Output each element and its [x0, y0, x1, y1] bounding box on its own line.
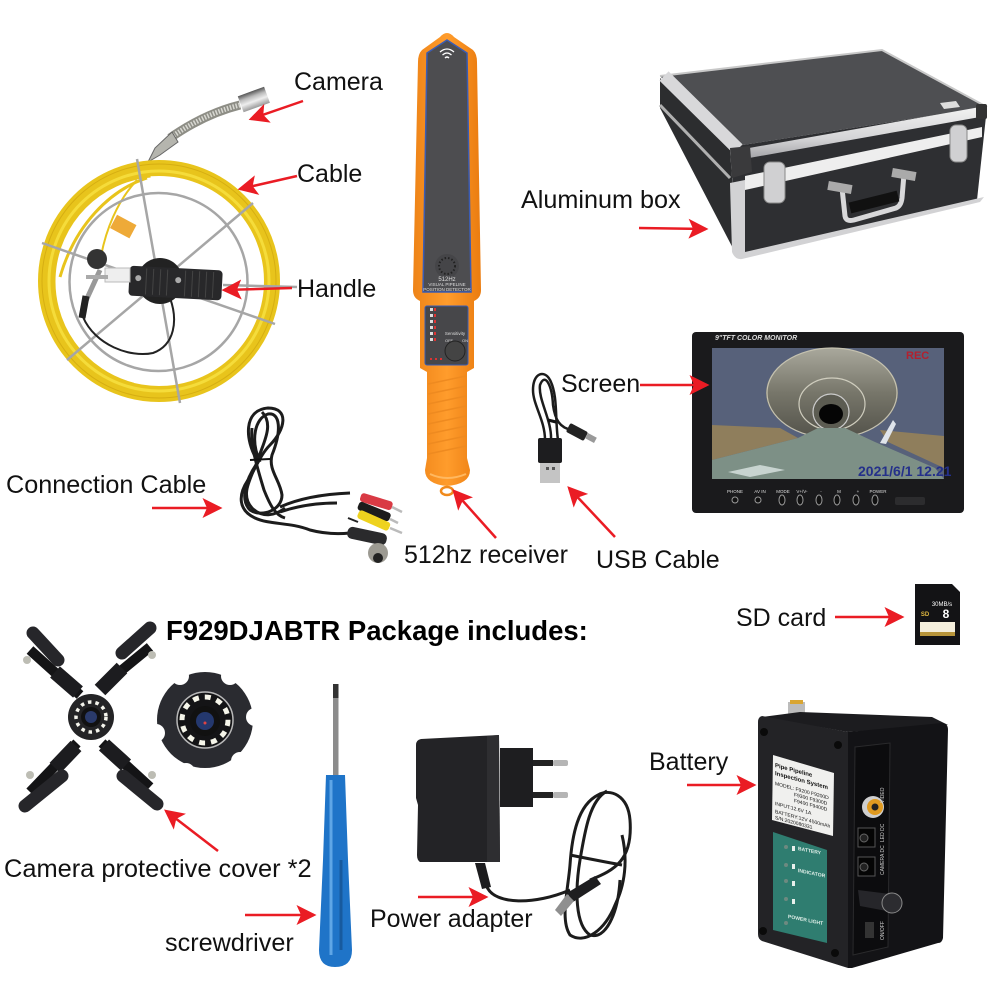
button labels: M — [837, 489, 841, 494]
label: Aluminum box: Aluminum box — [521, 186, 681, 214]
buttons — [732, 495, 878, 505]
button labels: MODE — [776, 489, 790, 494]
label: screwdriver: screwdriver — [165, 929, 294, 957]
panel text — [788, 844, 826, 927]
dark panel — [423, 40, 471, 292]
cable — [487, 791, 630, 938]
handle — [128, 266, 223, 300]
panel indicators — [784, 845, 788, 925]
button labels: + — [857, 489, 860, 494]
control panel — [425, 306, 468, 365]
panel text: POWER LIGHT — [788, 914, 824, 927]
handle — [842, 174, 904, 220]
icon: 512hz receiver: Sensitivity — [445, 331, 466, 336]
switch — [865, 922, 874, 938]
side labels: LED DC — [880, 823, 886, 842]
icon: aluminum box — [660, 50, 987, 259]
tunnel — [766, 348, 898, 438]
arrow: Aluminum box — [639, 228, 706, 229]
orange body — [413, 33, 481, 486]
label text: F9400 F9400D — [794, 798, 828, 813]
charger body — [416, 735, 500, 862]
icon: 512hz receiver: POSITION DETECTOR — [423, 287, 471, 292]
heading: package includes: F929DJABTR Package includes: — [166, 615, 588, 646]
arrow: protective cover — [166, 811, 218, 851]
DC plug — [567, 876, 601, 902]
BNC stem — [788, 702, 805, 722]
icon: SD card — [915, 584, 960, 645]
icon: connection cable — [241, 408, 402, 563]
label: Camera: Camera — [294, 68, 383, 96]
lid edges — [660, 50, 987, 107]
panel text: BATTERY — [798, 846, 822, 857]
knob — [858, 890, 892, 912]
orange label — [110, 215, 136, 238]
gooseneck tip — [148, 132, 178, 162]
label: Camera protective cover *2: Camera protective cover *2 — [4, 855, 312, 883]
label: Connection Cable: Connection Cable — [6, 471, 206, 499]
corners — [730, 146, 752, 178]
icon: battery box — [758, 700, 948, 968]
icon: SD card: 30MB/s — [932, 602, 952, 608]
arrow: Connection Cable — [152, 507, 220, 509]
arrow: Camera — [251, 101, 303, 119]
label text — [775, 762, 830, 836]
label text: S/N:2020080331 — [775, 815, 813, 831]
label: 512hz receiver: 512hz receiver — [404, 541, 568, 569]
bolts — [23, 651, 156, 779]
arrow: SD card — [835, 616, 902, 618]
plug pins — [533, 760, 553, 766]
label text: MODEL: F9200 F9200D — [775, 781, 829, 802]
side face — [848, 723, 948, 968]
side — [660, 78, 738, 258]
yellow cable coil — [42, 164, 276, 398]
front — [730, 107, 987, 258]
side labels: VIDEO — [880, 787, 886, 803]
hanging ring — [441, 487, 453, 495]
icon: screen monitor: REC — [906, 350, 929, 362]
button labels: PHONE — [727, 489, 743, 494]
LEDs — [430, 308, 442, 360]
label: SD card: SD card — [736, 604, 826, 632]
middle rail — [745, 127, 982, 190]
icon: camera protective cover, X shape — [23, 628, 157, 806]
panel text: INDICATOR — [798, 868, 826, 879]
icon: 512hz receiver — [413, 33, 481, 495]
aviation connector — [346, 526, 388, 546]
screw holes — [759, 728, 842, 957]
speaker — [435, 254, 459, 278]
label: Cable: Cable — [297, 160, 362, 188]
icon: cable reel with camera — [42, 87, 297, 403]
icon: 512hz receiver: ON — [462, 338, 468, 343]
icon: screen monitor — [692, 332, 964, 513]
label text: F9300 F9300D — [794, 792, 828, 807]
label text: Inspection System — [775, 770, 828, 791]
connector — [84, 270, 100, 305]
green panel — [773, 832, 827, 943]
arrow: Screen — [640, 384, 707, 386]
icon: screwdriver — [319, 684, 352, 967]
icon: screen monitor: 9"TFT COLOR MONITOR — [715, 335, 797, 342]
reel hub — [137, 258, 183, 304]
side recess — [853, 743, 890, 955]
notches — [147, 667, 264, 781]
gooseneck spring — [170, 105, 240, 138]
lower trim — [730, 180, 984, 259]
label: Battery: Battery — [649, 748, 729, 776]
arrow: Battery — [687, 784, 754, 786]
label: Handle: Handle — [297, 275, 376, 303]
strain relief — [475, 863, 491, 889]
label: Power adapter: Power adapter — [370, 905, 533, 933]
icon: SD card: SD — [921, 612, 930, 618]
arrow: Cable — [240, 176, 297, 189]
icon: 512hz receiver: VISUAL PIPELINE — [428, 282, 466, 287]
arrow: Handle — [224, 288, 292, 290]
label text: INPUT:12.6V 1A — [775, 801, 812, 817]
button labels: V+/V- — [796, 489, 808, 494]
side labels — [880, 787, 886, 940]
label text: Pipe Pipeline — [775, 762, 813, 779]
camera head — [238, 87, 270, 112]
white sticker — [940, 101, 960, 109]
end wheels — [25, 628, 157, 806]
top face — [762, 712, 948, 732]
icon: USB cable — [533, 374, 597, 483]
icon: SD card: 8 — [943, 607, 950, 621]
side labels: CAMERA DC — [880, 845, 886, 875]
button labels: AV IN — [754, 489, 766, 494]
panel text: 512Hz — [438, 277, 456, 283]
arrow: 512hz receiver — [454, 491, 496, 538]
label text: BATTERY:12V 4500mAh — [775, 809, 830, 830]
front face — [758, 716, 848, 968]
arm blocks — [55, 668, 126, 768]
icon: screen monitor: 2021/6/1 12.21 — [858, 463, 952, 479]
arrow: screwdriver — [245, 914, 314, 916]
plug base — [500, 748, 533, 807]
arrow: USB cable — [569, 488, 615, 537]
wifi — [440, 49, 454, 58]
button labels — [727, 489, 887, 494]
lid — [660, 50, 987, 147]
latches — [764, 162, 785, 203]
icon: 512hz receiver: OFF — [445, 338, 454, 343]
grip ridges — [428, 376, 466, 454]
button labels: - — [820, 489, 822, 494]
reel frame — [42, 159, 297, 403]
DC jacks — [858, 828, 875, 847]
RCA plugs — [359, 492, 393, 511]
arrow: power adapter — [418, 896, 486, 898]
button labels: POWER — [869, 489, 887, 494]
label: Screen: Screen — [561, 370, 640, 398]
black cord — [83, 298, 174, 354]
RCA jack — [862, 796, 884, 818]
label: USB Cable: USB Cable — [596, 546, 720, 574]
icon: camera protective cover, round — [147, 667, 264, 781]
arms — [30, 647, 150, 792]
banks and water — [712, 425, 798, 460]
icon: power adapter — [416, 735, 630, 938]
side labels: ON/OFF — [880, 921, 886, 940]
white label — [772, 755, 834, 836]
